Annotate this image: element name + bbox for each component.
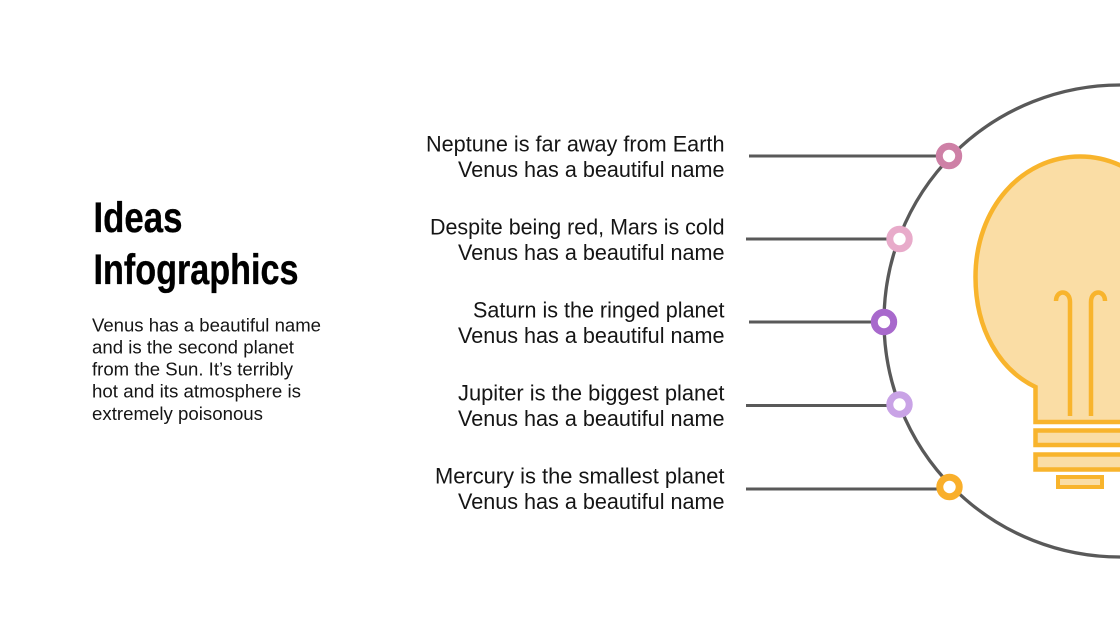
connector [746, 238, 890, 240]
label: Neptune is far away from Earth [426, 132, 724, 156]
label [458, 380, 724, 431]
label: Venus has a beautiful name [458, 323, 724, 348]
label [458, 298, 724, 348]
intro text block: from the Sun. It’s terribly [92, 358, 294, 380]
label: Despite being red, Mars is cold [430, 214, 724, 240]
marker [874, 312, 894, 332]
title: Infographics [94, 246, 298, 294]
label: Venus has a beautiful name [458, 489, 724, 514]
label: Mercury is the smallest planet [435, 464, 724, 488]
label [430, 214, 724, 265]
marker [890, 395, 909, 414]
title [94, 194, 298, 294]
label [426, 132, 724, 182]
connector [749, 154, 940, 158]
label [435, 464, 724, 514]
intro text block: Venus has a beautiful name [92, 314, 321, 336]
large circle outline [884, 85, 1120, 557]
item 5: Mercury [435, 464, 959, 514]
item 3: Saturn [458, 298, 894, 348]
intro text block [92, 314, 321, 424]
connector [746, 404, 890, 407]
title: Ideas [94, 194, 182, 242]
label: Venus has a beautiful name [458, 406, 724, 431]
item 1: Neptune [426, 132, 959, 182]
label: Jupiter is the biggest planet [458, 380, 724, 406]
marker [939, 146, 959, 166]
filaments [1056, 292, 1105, 416]
item 4: Jupiter [458, 380, 909, 431]
label: Venus has a beautiful name [458, 240, 724, 265]
intro text block: and is the second planet [92, 336, 294, 358]
item 2: Mars [430, 214, 909, 265]
connector [749, 320, 875, 324]
bulb base tip [1058, 477, 1102, 487]
bulb glass [976, 156, 1120, 422]
label: Saturn is the ringed planet [473, 298, 724, 322]
intro text block: extremely poisonous [92, 403, 263, 424]
bulb base ring upper [1036, 430, 1120, 445]
intro text block: hot and its atmosphere is [92, 380, 301, 402]
marker [940, 477, 959, 497]
icon: light bulb [976, 156, 1120, 487]
label: Venus has a beautiful name [458, 157, 724, 182]
connector [746, 488, 940, 490]
bulb base ring lower [1036, 454, 1120, 470]
marker [890, 229, 909, 249]
